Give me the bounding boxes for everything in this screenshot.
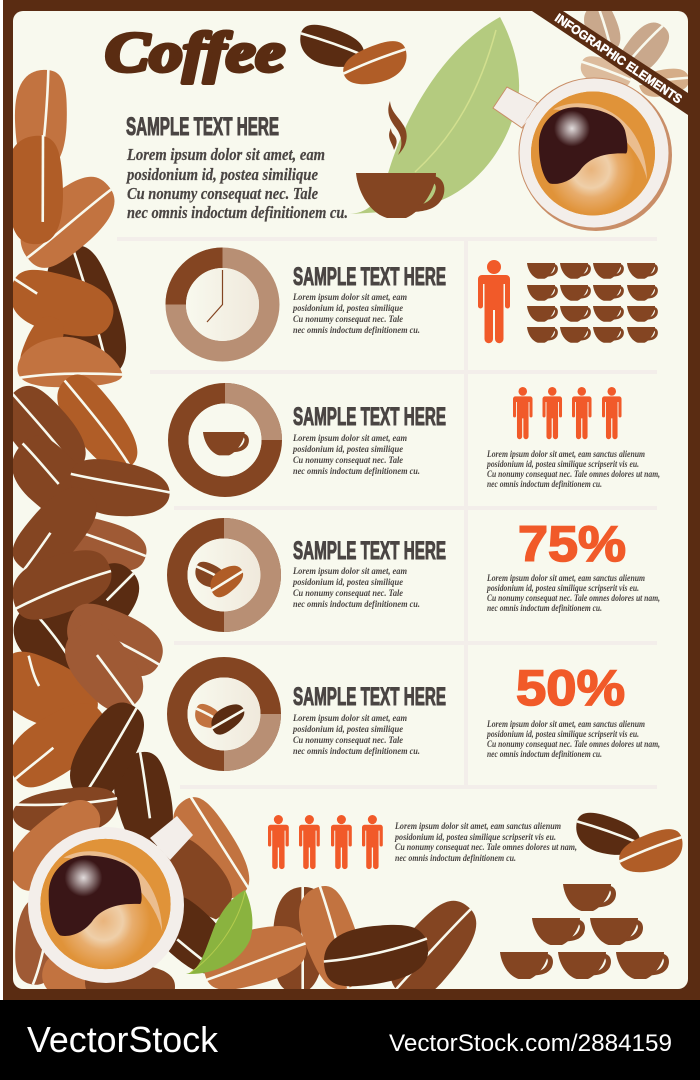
intro text block: Lorem ipsum dolor sit amet, eam bbox=[126, 145, 325, 164]
text block: bottom note bbox=[394, 822, 577, 864]
text block: row three bbox=[292, 537, 446, 610]
text block: seventy five note: posidonium id, postea similique scripserit vis eu. bbox=[486, 584, 639, 594]
footer bar bbox=[0, 1000, 700, 1080]
intro text block: posidonium id, postea similique bbox=[125, 165, 318, 184]
intro text block: nec omnis indoctum definitionem cu. bbox=[127, 203, 348, 222]
icon: cup pyramid bbox=[500, 884, 669, 979]
text block: row one: Lorem ipsum dolor sit amet, eam bbox=[292, 293, 407, 303]
text block: seventy five note: Cu nonumy consequat nec. Tale omnes dolores ut nam, bbox=[487, 594, 660, 604]
text block: row three: Lorem ipsum dolor sit amet, eam bbox=[292, 567, 407, 577]
icon: four people bbox=[513, 387, 622, 439]
text block: row four: SAMPLE TEXT HERE bbox=[293, 683, 446, 711]
text block: row one: Cu nonumy consequat nec. Tale bbox=[293, 315, 404, 325]
text block: bottom note: nec omnis indoctum definitionem cu. bbox=[395, 854, 516, 864]
text block: row two: Lorem ipsum dolor sit amet, eam bbox=[292, 434, 407, 444]
icon: bottom coffee cup bbox=[28, 816, 193, 983]
intro text block bbox=[125, 113, 348, 222]
icon: person large bbox=[478, 260, 510, 343]
intro text block: SAMPLE TEXT HERE bbox=[126, 113, 279, 141]
text block: bottom note: posidonium id, postea similique scripserit vis eu. bbox=[394, 833, 556, 843]
text block: people note bbox=[486, 450, 660, 490]
text block: seventy five note: nec omnis indoctum definitionem cu. bbox=[487, 604, 602, 614]
text block: row four bbox=[292, 683, 446, 757]
text block: row two: posidonium id, postea similique bbox=[292, 445, 404, 455]
text block: seventy five note bbox=[486, 574, 660, 614]
text block: row one bbox=[292, 263, 446, 336]
text block: fifty note: nec omnis indoctum definitionem cu. bbox=[487, 750, 602, 760]
icon: title beans bbox=[296, 22, 412, 90]
icon: large leaf bbox=[350, 17, 519, 214]
text block: row four: Lorem ipsum dolor sit amet, eam bbox=[292, 714, 407, 724]
text block: row three: Cu nonumy consequat nec. Tale bbox=[293, 589, 404, 599]
text block: row three: SAMPLE TEXT HERE bbox=[293, 537, 446, 565]
text block: bottom note: Lorem ipsum dolor sit amet, eam sanctus alienum bbox=[394, 822, 561, 832]
icon grid: sixteen cups bbox=[527, 263, 658, 343]
text block: row four: Cu nonumy consequat nec. Tale bbox=[293, 736, 404, 746]
chart: three quarter beans donut bbox=[177, 667, 271, 761]
text block: people note: nec omnis indoctum definitionem cu. bbox=[487, 480, 602, 490]
icon: top view coffee cup bbox=[493, 78, 672, 231]
text block: bottom note: Cu nonumy consequat nec. Tale omnes dolores ut nam, bbox=[395, 843, 577, 853]
text block: row two: SAMPLE TEXT HERE bbox=[293, 403, 446, 431]
text block: row three: nec omnis indoctum definitionem cu. bbox=[293, 600, 420, 610]
chart: clock donut bbox=[176, 258, 269, 351]
text block: row four: nec omnis indoctum definitionem cu. bbox=[293, 747, 420, 757]
text block: row one: SAMPLE TEXT HERE bbox=[293, 263, 446, 291]
text block: row one: nec omnis indoctum definitionem cu. bbox=[293, 326, 420, 336]
coffee bean pile left and bottom bbox=[0, 69, 491, 1023]
footer bar: VectorStock.com/2884159 bbox=[389, 1030, 672, 1057]
stat: fifty percent: 50% bbox=[516, 660, 625, 716]
icon: steaming cup bbox=[356, 101, 444, 218]
icon: bottom four people bbox=[268, 815, 383, 869]
text block: row four: posidonium id, postea similique bbox=[292, 725, 404, 735]
icon: small green leaf bbox=[186, 890, 252, 974]
text block: row two: Cu nonumy consequat nec. Tale bbox=[293, 456, 404, 466]
faded beans top right corner bbox=[580, 11, 688, 97]
text block: row two bbox=[292, 403, 446, 477]
text block: people note: Lorem ipsum dolor sit amet, eam sanctus alienum bbox=[486, 450, 645, 460]
intro text block: Cu nonumy consequat nec. Tale bbox=[127, 184, 318, 203]
text block: fifty note: Cu nonumy consequat nec. Tale omnes dolores ut nam, bbox=[487, 740, 660, 750]
text block: row one: posidonium id, postea similique bbox=[292, 304, 404, 314]
text block: people note: Cu nonumy consequat nec. Tale omnes dolores ut nam, bbox=[487, 470, 660, 480]
footer bar: VectorStock bbox=[27, 1019, 219, 1060]
text block: fifty note: posidonium id, postea similique scripserit vis eu. bbox=[486, 730, 639, 740]
icon: bottom right beans bbox=[572, 810, 688, 878]
divider lines bbox=[117, 237, 657, 789]
text block: seventy five note: Lorem ipsum dolor sit amet, eam sanctus alienum bbox=[486, 574, 645, 584]
chart: half beans donut bbox=[177, 528, 271, 622]
text block: fifty note bbox=[486, 720, 660, 760]
infographic elements banner: INFOGRAPHIC ELEMENTS bbox=[552, 11, 685, 106]
text block: people note: posidonium id, postea similique scripserit vis eu. bbox=[486, 460, 639, 470]
stat: seventy five percent: 75% bbox=[518, 516, 626, 572]
text block: row three: posidonium id, postea similique bbox=[292, 578, 404, 588]
text block: row two: nec omnis indoctum definitionem cu. bbox=[293, 467, 420, 477]
text block: fifty note: Lorem ipsum dolor sit amet, eam sanctus alienum bbox=[486, 720, 645, 730]
title: Coffee bbox=[105, 22, 285, 84]
chart: cup donut bbox=[178, 393, 272, 487]
